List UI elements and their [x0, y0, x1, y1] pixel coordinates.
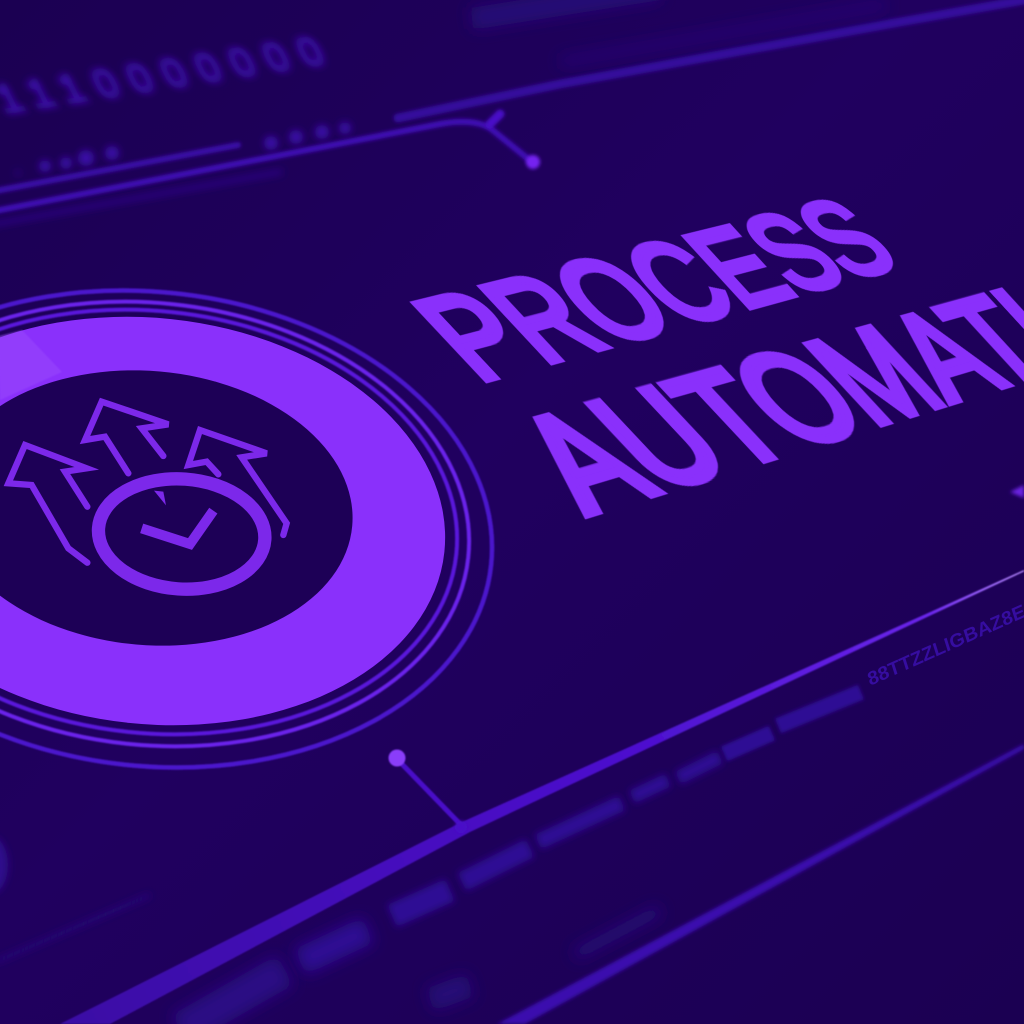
title: PROCESS: PROCESS — [384, 203, 1024, 408]
small node mark at right edge — [1010, 485, 1024, 498]
outer thin rings — [0, 257, 516, 801]
faint left trace — [0, 895, 150, 962]
progress ring — [0, 288, 466, 754]
long upper band — [398, 0, 1024, 118]
faint bottom text — [575, 910, 660, 955]
stem dot — [388, 750, 406, 766]
ring 3 — [0, 257, 516, 801]
main diagonal line — [60, 570, 1024, 1024]
lower diagonal line — [497, 744, 1024, 1024]
faint lower trace — [0, 172, 280, 224]
clock face — [95, 473, 269, 595]
arrow middle — [85, 402, 168, 473]
icon: arrows and clock — [8, 402, 287, 595]
small caption text: 88TTZZLIGBAZ8E — [865, 601, 1024, 691]
main bent trace with dot — [0, 122, 532, 211]
blurred caption row — [180, 692, 861, 1024]
short left trace — [0, 145, 238, 191]
stem — [400, 762, 462, 826]
top circuit lines — [0, 0, 1024, 224]
clock tick — [154, 491, 166, 505]
blurred dots rows — [16, 122, 351, 175]
faint bottom marks — [0, 895, 660, 1000]
ring lighter segment — [0, 330, 62, 400]
top trace end dot — [526, 155, 540, 169]
ring 2 — [0, 271, 491, 777]
connector stem with dot — [388, 750, 467, 833]
trace junction — [490, 114, 500, 124]
ring inner dark disk — [0, 354, 364, 662]
arrow left — [8, 445, 87, 563]
stem base — [455, 821, 467, 833]
ring 1 — [0, 280, 478, 764]
arrow right — [188, 430, 287, 535]
faint bottom text 2 — [430, 985, 470, 1000]
blurred left edge circle — [0, 837, 8, 893]
clock hands — [142, 511, 213, 544]
blurred top right panels — [470, 0, 886, 66]
